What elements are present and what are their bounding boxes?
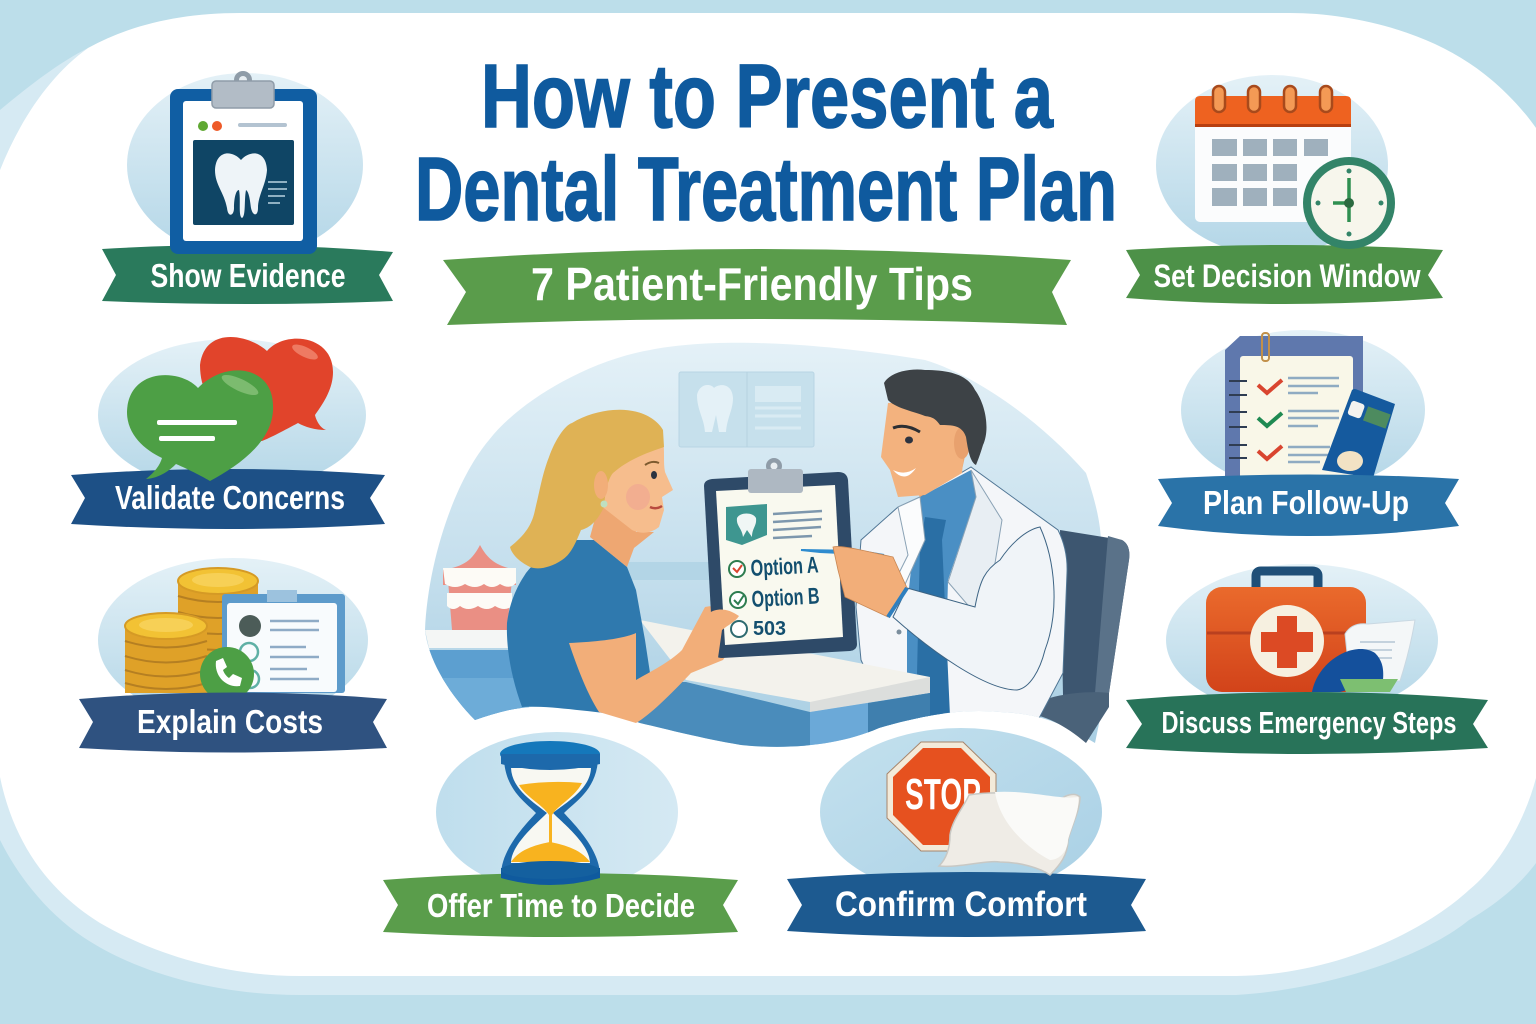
scene backdrop bbox=[425, 342, 1101, 747]
tip: plan follow-up bbox=[1158, 330, 1459, 536]
tip: explain costs: Explain Costs bbox=[137, 703, 323, 740]
wall x-ray panel bbox=[679, 372, 814, 447]
icon: stop sign and pillow bbox=[887, 742, 1080, 875]
ribbon label bbox=[787, 872, 1146, 937]
icon bubble bbox=[1181, 330, 1425, 490]
icon bubble bbox=[820, 728, 1102, 896]
left counter bbox=[425, 630, 529, 720]
icon: checklist and card bbox=[1225, 333, 1395, 478]
tip: discuss emergency steps bbox=[1126, 564, 1488, 754]
icon: calendar and clock bbox=[1195, 86, 1395, 249]
ribbon text: Set Decision Window bbox=[1154, 258, 1421, 294]
icon bubble bbox=[1156, 75, 1388, 255]
ribbon label bbox=[1158, 474, 1459, 536]
title: How to Present a bbox=[481, 47, 1054, 147]
ribbon label bbox=[79, 692, 387, 752]
ribbon text: Show Evidence bbox=[150, 257, 346, 294]
icon: stop sign and pillow: STOP bbox=[905, 770, 981, 819]
ribbon label bbox=[1126, 692, 1488, 754]
ribbon label bbox=[383, 873, 738, 937]
clipboard with options bbox=[694, 458, 907, 658]
icon: hourglass bbox=[500, 741, 600, 885]
tip: confirm comfort bbox=[787, 728, 1146, 937]
subtitle ribbon: 7 Patient-Friendly Tips bbox=[531, 258, 973, 310]
dentist bbox=[856, 370, 1067, 760]
chair bbox=[1021, 530, 1129, 743]
wall stripe bbox=[620, 562, 710, 580]
tip: set decision window bbox=[1126, 75, 1443, 304]
icon bubble bbox=[1166, 564, 1438, 716]
icon: first aid kit bbox=[1206, 571, 1415, 692]
ribbon band bbox=[1126, 245, 1443, 304]
ribbon text: Offer Time to Decide bbox=[427, 887, 695, 924]
tip: plan follow-up: Plan Follow-Up bbox=[1203, 484, 1409, 521]
clipboard with options: 503 bbox=[753, 618, 786, 640]
icon: coins and estimate bbox=[125, 568, 345, 701]
ribbon band bbox=[102, 245, 393, 304]
ribbon band bbox=[71, 469, 385, 529]
tip: offer time to decide bbox=[383, 732, 738, 937]
title: Dental Treatment Plan bbox=[415, 140, 1117, 240]
icon bubble bbox=[98, 558, 368, 722]
icon bubble bbox=[127, 73, 363, 257]
tip: show evidence bbox=[102, 71, 393, 304]
subtitle ribbon bbox=[443, 249, 1071, 325]
icon: speech hearts bbox=[127, 337, 333, 481]
tip: explain costs bbox=[79, 558, 387, 752]
tip: validate concerns bbox=[71, 337, 385, 529]
desk bbox=[638, 620, 930, 747]
clipboard with options: Option B bbox=[751, 582, 820, 612]
center scene bbox=[420, 330, 1140, 760]
ribbon text: Confirm Comfort bbox=[835, 885, 1087, 924]
clipboard with options: Option A bbox=[750, 551, 819, 581]
title bbox=[415, 47, 1117, 240]
icon bubble bbox=[98, 339, 366, 491]
teeth model bbox=[443, 545, 516, 630]
icon: clipboard with x-ray bbox=[170, 71, 317, 254]
icon bubble bbox=[436, 732, 678, 892]
patient bbox=[507, 410, 741, 723]
scene room bbox=[425, 342, 1101, 747]
ribbon text: Validate Concerns bbox=[115, 479, 345, 516]
